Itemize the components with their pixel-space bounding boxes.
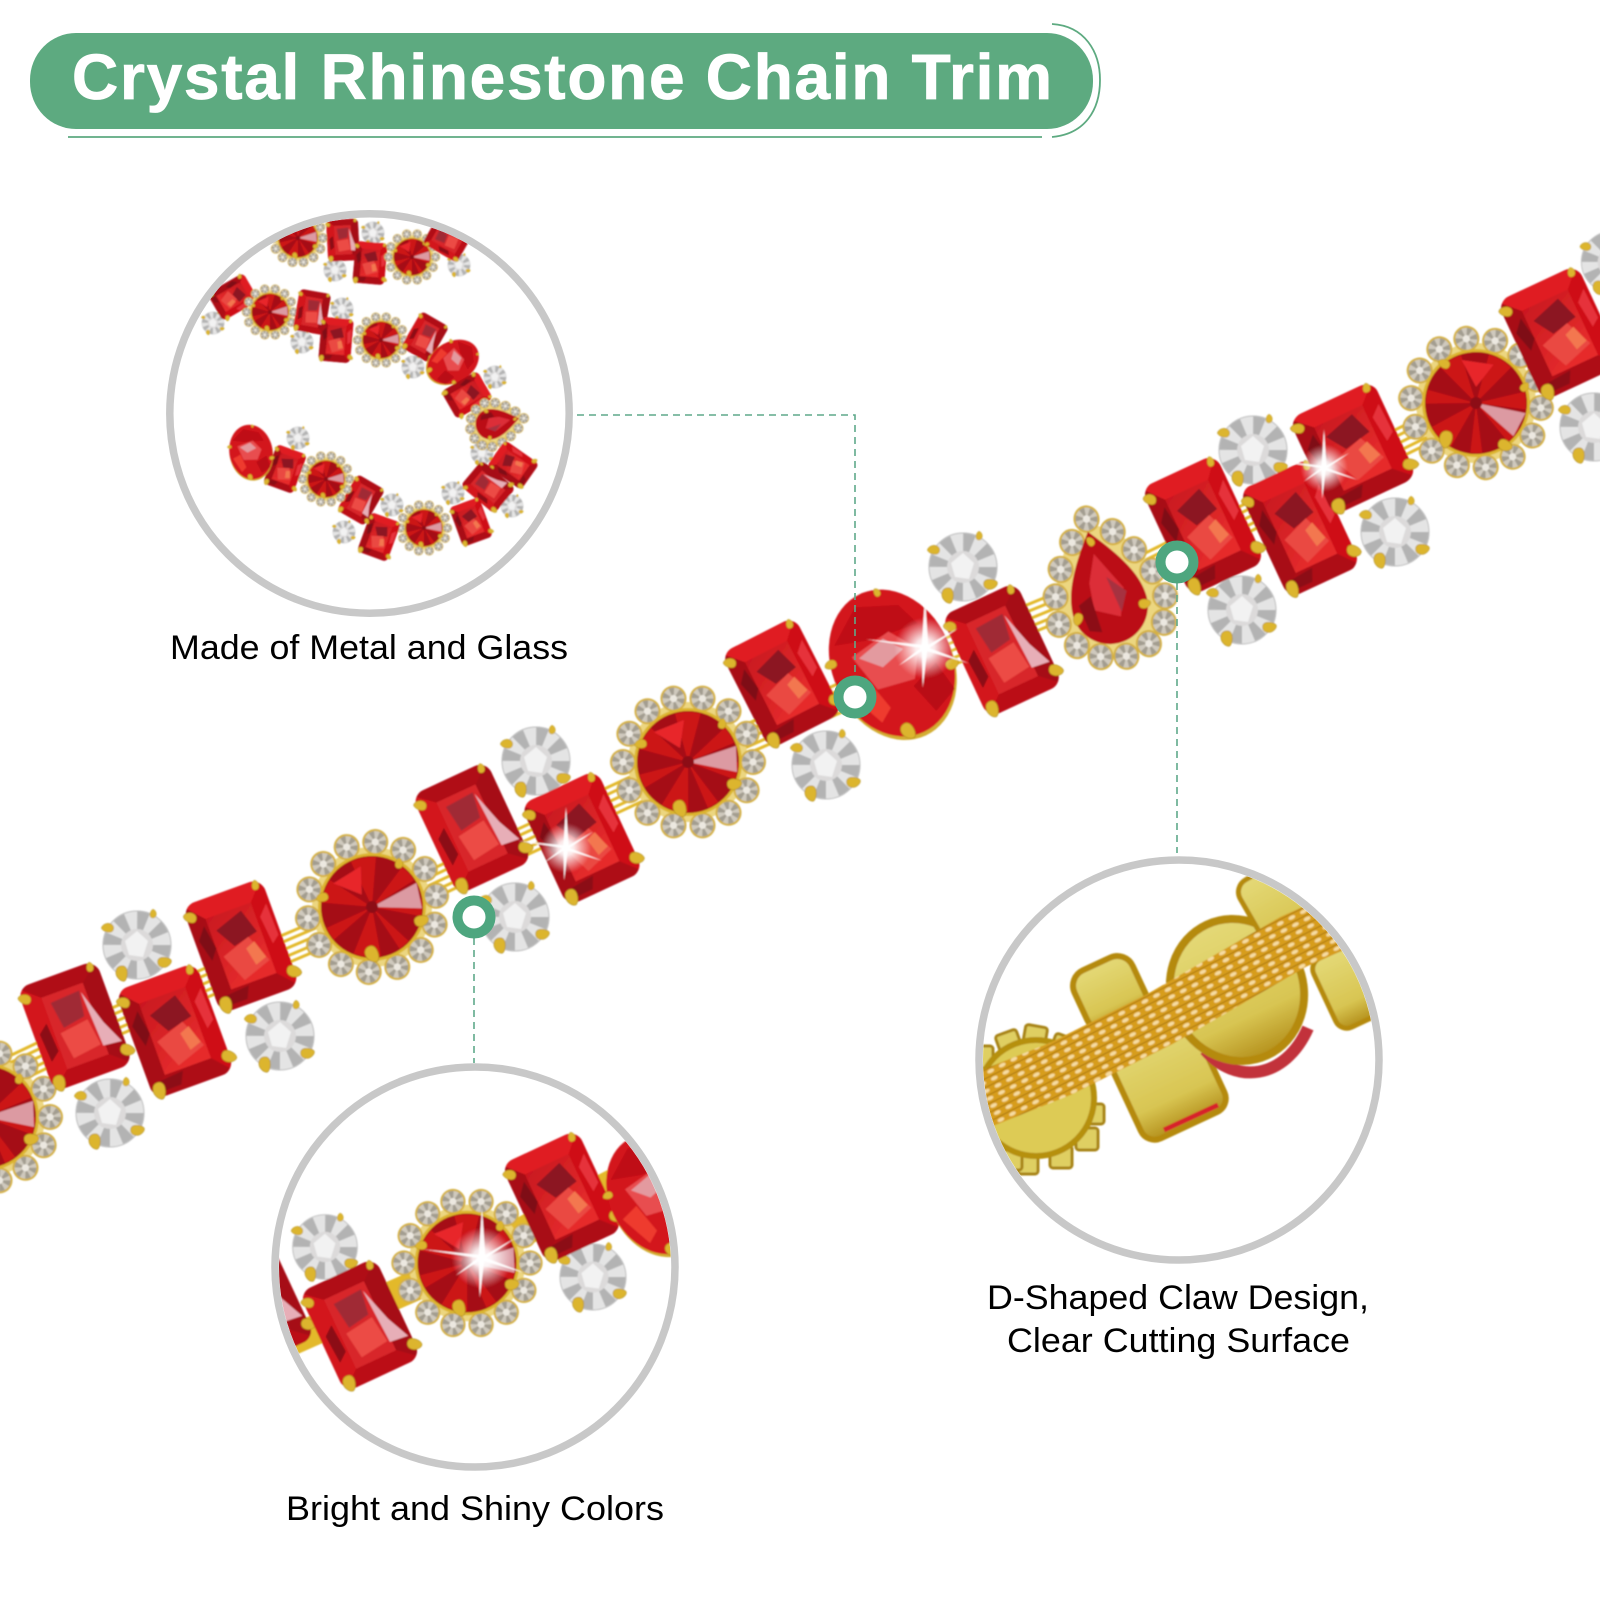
caption <box>987 1279 1369 1360</box>
panel: made of metal and glass <box>170 209 569 667</box>
halo round gems <box>0 298 1582 1193</box>
mesh band <box>0 320 1600 1100</box>
circle contents: curved chain <box>201 209 542 564</box>
marker dot 3 <box>458 900 490 934</box>
title text: Crystal Rhinestone Chain Trim <box>72 41 1052 113</box>
oval gem <box>802 568 982 762</box>
marker dot 1 <box>838 680 872 714</box>
back of rectangular setting <box>1110 1036 1230 1144</box>
back of upper setting <box>1234 876 1302 932</box>
pear gem with halo <box>1018 488 1194 687</box>
circle border <box>170 214 569 613</box>
circle contents: chain close-up <box>279 1131 671 1392</box>
back of oval setting <box>1164 914 1314 1080</box>
title banner <box>30 24 1100 137</box>
callout line to claw circle <box>1176 583 1178 853</box>
circle border <box>275 1067 675 1467</box>
caption: D-Shaped Claw Design, <box>987 1279 1369 1317</box>
panel: bright and shiny colors <box>271 1063 679 1527</box>
clear stones <box>74 229 1600 1150</box>
callout line to metal and glass circle <box>577 415 855 676</box>
rhinestone chain main product <box>0 229 1600 1193</box>
callout line to colours circle <box>473 938 475 1063</box>
circle border <box>979 860 1379 1260</box>
marker dot 2 <box>1160 546 1194 578</box>
back of small rounded stone <box>1068 952 1150 1026</box>
caption: Clear Cutting Surface <box>1007 1322 1350 1360</box>
back of round stone with halo <box>975 1024 1104 1174</box>
caption: Made of Metal and Glass <box>170 629 568 667</box>
panel: claw design back view <box>975 847 1395 1360</box>
back of right setting <box>1309 950 1372 1032</box>
gold mesh band <box>975 912 1360 1103</box>
caption: Bright and Shiny Colors <box>286 1490 664 1528</box>
rectangular red gems <box>13 261 1600 1104</box>
circle contents: gold back <box>983 876 1372 1177</box>
sparkles <box>517 429 1358 880</box>
